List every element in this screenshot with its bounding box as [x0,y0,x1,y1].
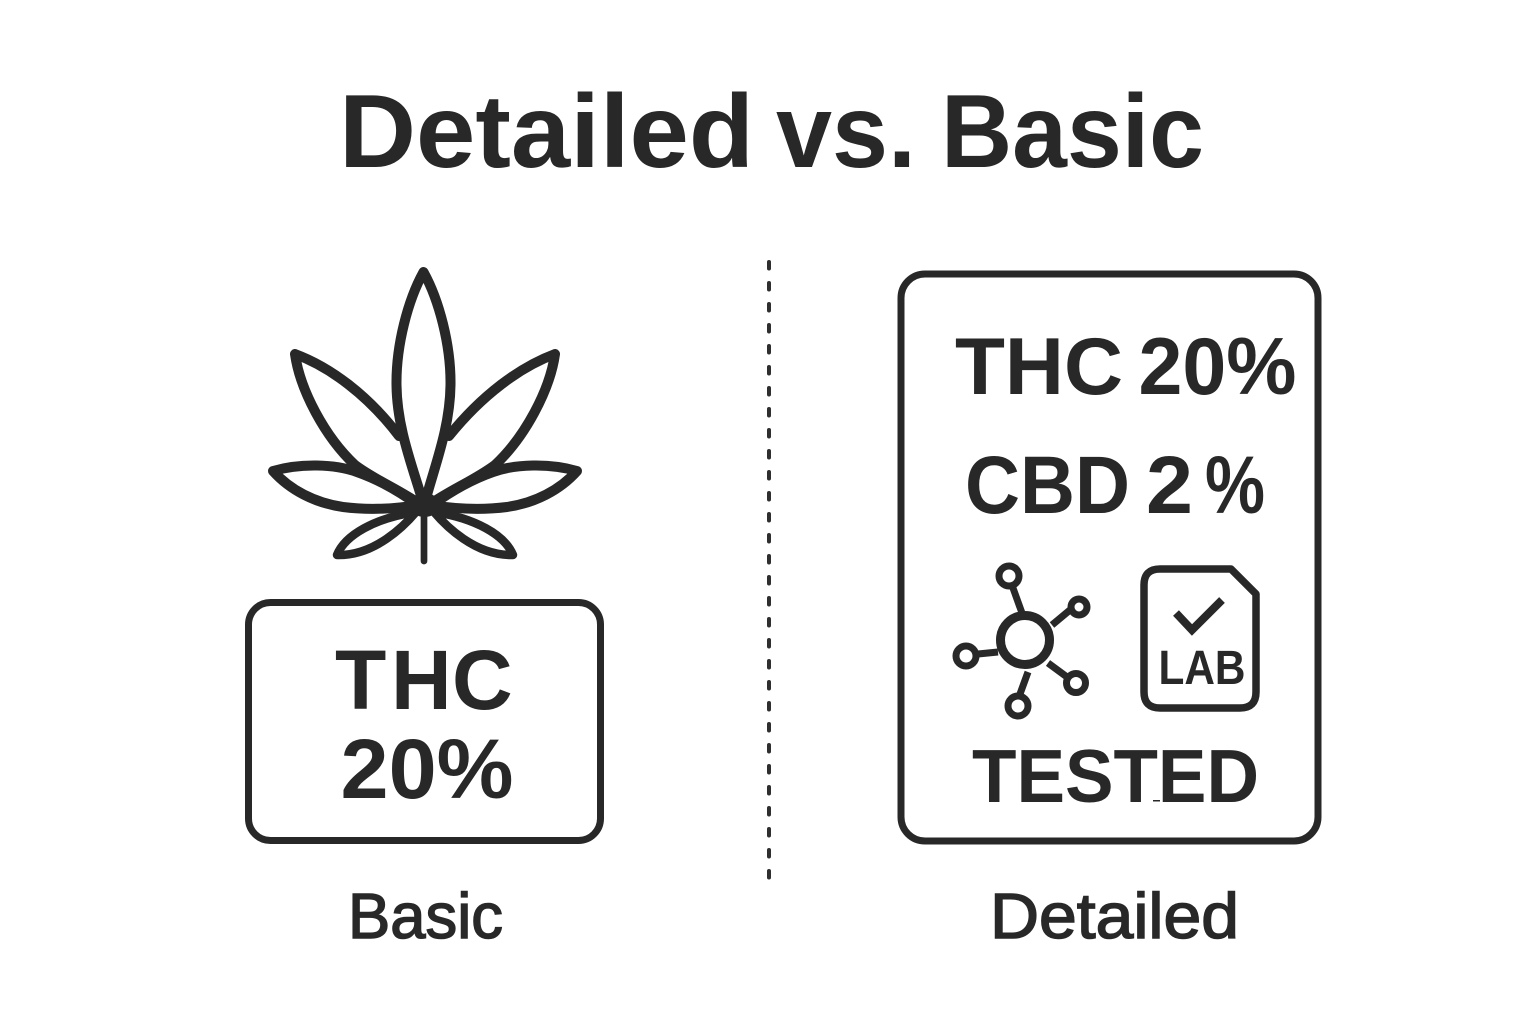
title: Basic [941,74,1204,190]
basic caption: Basic [348,880,503,952]
detailed CBD: 2 [1146,440,1193,531]
detailed THC [955,322,1296,412]
basic THC label: THC [335,633,513,727]
title [339,74,1204,190]
tested text: TESTED [972,734,1259,818]
detailed THC: 20% [1138,322,1296,412]
panel: detailed [901,274,1318,841]
detailed caption: Detailed [990,880,1239,952]
panel: basic [248,602,600,840]
lab text: LAB [1158,642,1246,695]
icon: molecule [956,566,1087,716]
title: Detailed [339,74,754,190]
detailed CBD [965,440,1265,531]
divider [767,262,771,878]
icon: cannabis leaf [273,272,577,561]
detailed CBD: CBD [965,440,1130,531]
title: vs. [776,74,916,190]
icon: lab document [1144,569,1256,708]
basic THC value: 20% [340,722,514,816]
detailed CBD: % [1205,440,1265,531]
detailed THC: THC [955,322,1123,412]
